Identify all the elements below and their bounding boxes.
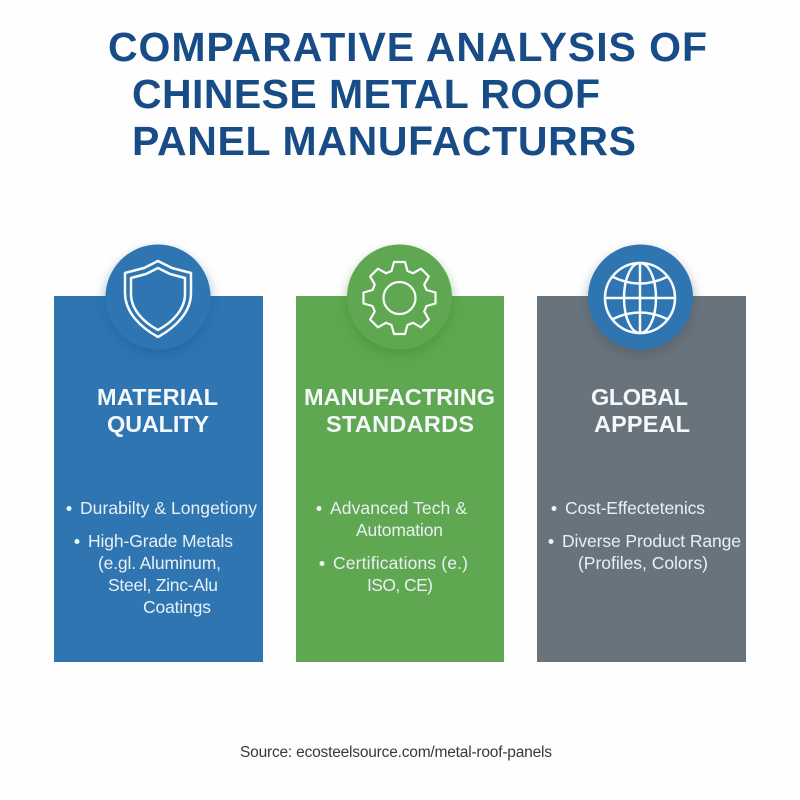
heading: global appeal: GLOBAL xyxy=(591,384,688,410)
panel: manufacturing standards xyxy=(296,244,504,662)
bullet list: material quality: High-Grade Metals xyxy=(88,531,233,551)
heading: manufacturing standards: STANDARDS xyxy=(326,411,474,437)
bullet list: material quality: Durabilty & Longetiony xyxy=(80,498,257,518)
panel: global appeal xyxy=(537,244,746,662)
source note: Source: ecosteelsource.com/metal-roof-panels xyxy=(240,744,552,761)
bullet list: global appeal xyxy=(548,498,741,573)
bullet list: material quality: Coatings xyxy=(143,597,211,617)
bullet list: material quality: (e.gl. Aluminum, xyxy=(98,553,221,573)
title xyxy=(108,24,707,164)
bullet list: global appeal: Diverse Product Range xyxy=(562,531,741,551)
heading: manufacturing standards xyxy=(304,384,495,437)
bullet list: material quality: Steel, Zinc-Alu xyxy=(108,575,218,595)
heading: global appeal xyxy=(591,384,690,437)
bullet list: manufacturing standards: Certifications (e.) xyxy=(333,553,468,573)
bullet list: manufacturing standards: Automation xyxy=(356,520,443,540)
icon: gear xyxy=(347,244,452,350)
title: CHINESE METAL ROOF xyxy=(132,71,600,117)
title: PANEL MANUFACTURRS xyxy=(132,118,636,164)
heading: material quality: MATERIAL xyxy=(97,384,218,410)
heading: manufacturing standards: MANUFACTRING xyxy=(304,384,495,410)
icon: globe xyxy=(588,244,693,350)
heading: global appeal: APPEAL xyxy=(594,411,690,437)
bullet list: global appeal: Cost-Effectetenics xyxy=(565,498,705,518)
title: COMPARATIVE ANALYSIS OF xyxy=(108,24,707,70)
bullet list: material quality xyxy=(66,498,257,617)
panel: material quality xyxy=(54,244,263,662)
bullet list: global appeal: (Profiles, Colors) xyxy=(578,553,708,573)
bullet list: manufacturing standards xyxy=(316,498,468,595)
bullet list: manufacturing standards: ISO, CE) xyxy=(367,575,433,595)
bullet list: manufacturing standards: Advanced Tech & xyxy=(330,498,467,518)
heading: material quality: QUALITY xyxy=(107,411,209,437)
icon: shield xyxy=(106,244,210,350)
heading: material quality xyxy=(97,384,218,437)
